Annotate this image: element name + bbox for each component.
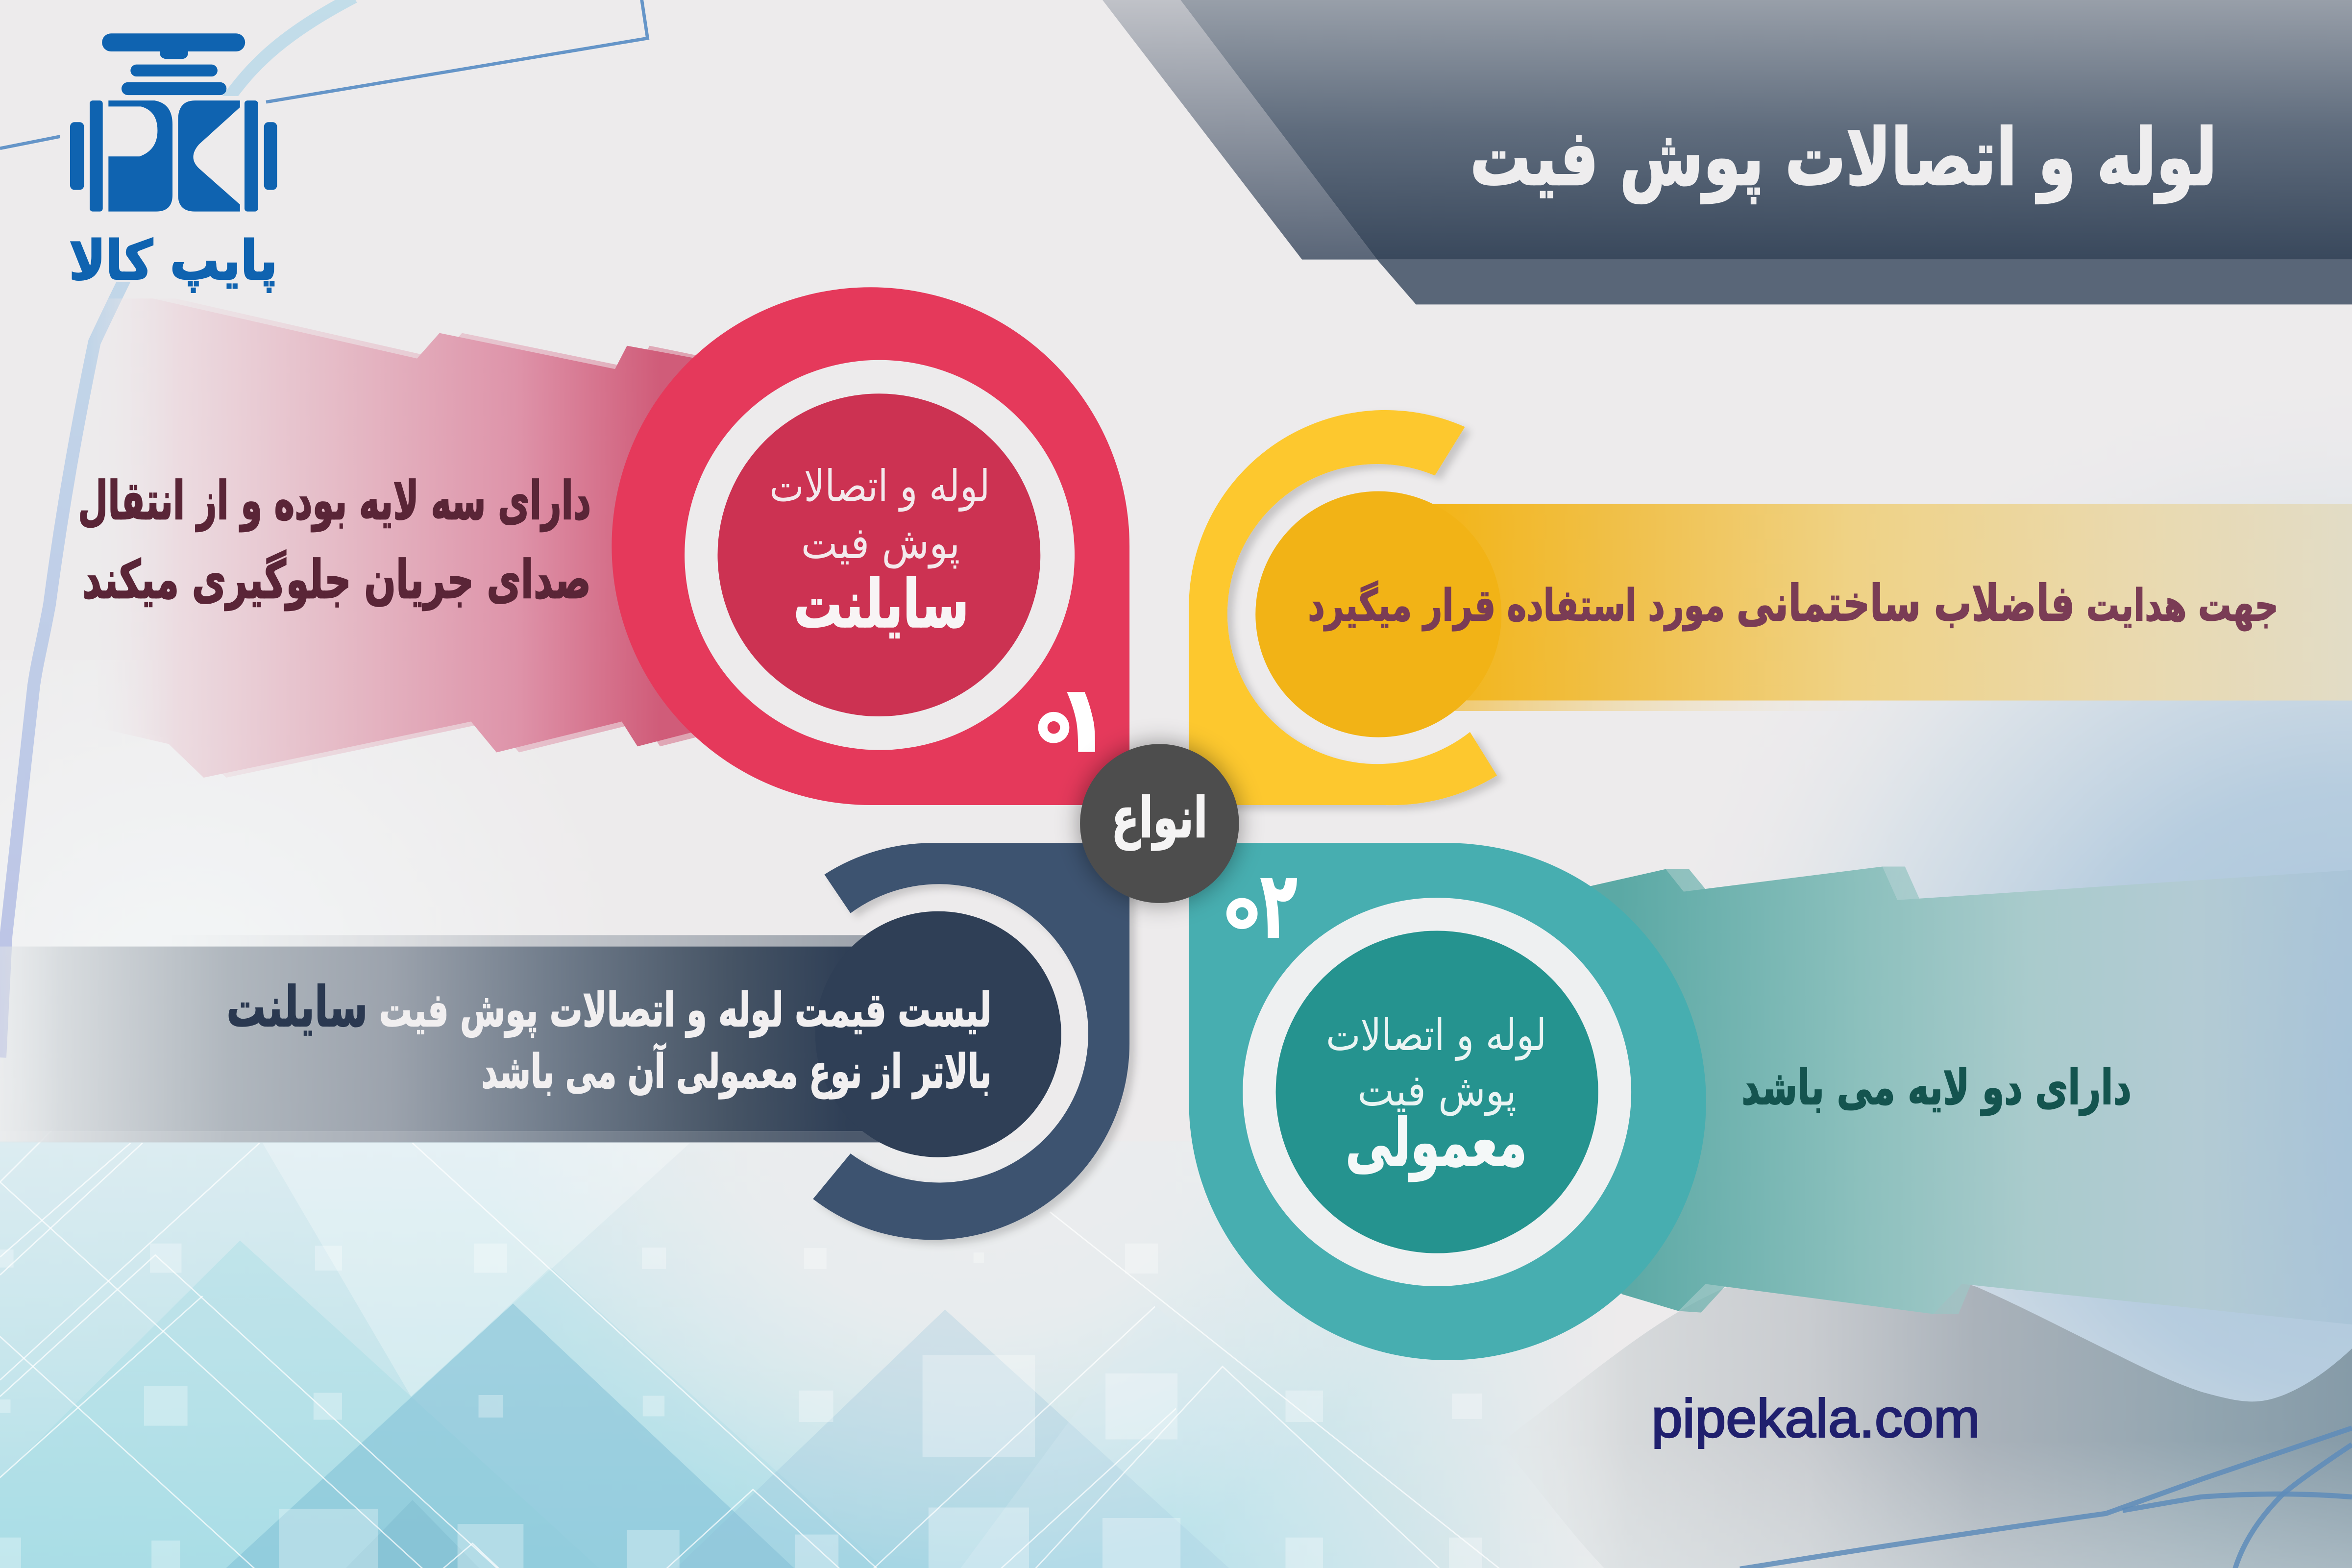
text: navy description: لیست قیمت لوله و اتصالات پوش فیت سایلنت bbox=[226, 975, 991, 1039]
text: navy description: بالاتر از نوع معمولی آن می باشد bbox=[482, 1043, 991, 1099]
panel: teal ribbon bbox=[1589, 866, 2352, 1324]
text: navy description bbox=[226, 975, 991, 1099]
center badge bbox=[1080, 744, 1239, 903]
panel: red pin 01 bbox=[612, 287, 1129, 805]
decorative curved band bbox=[0, 0, 354, 1057]
panel: teal pin 02: معمولی bbox=[1346, 1104, 1527, 1182]
logo wordmark: پایپ کالا bbox=[69, 229, 277, 292]
text: teal description: دارای دو لایه می باشد bbox=[1741, 1060, 2132, 1116]
wave: lower right bbox=[1500, 1271, 2352, 1568]
text: red description bbox=[78, 471, 591, 611]
panel: navy C shape bbox=[813, 843, 1129, 1240]
center badge: انواع bbox=[1111, 785, 1207, 851]
panel: navy ribbon bbox=[0, 935, 885, 1142]
text: yellow description: جهت هدایت فاضلاب ساختمانی مورد استفاده قرار میگیرد bbox=[1308, 574, 2278, 632]
website url: pipekala.com bbox=[1651, 1389, 1980, 1449]
panel: yellow C shape bbox=[1189, 410, 1501, 805]
panel: red ribbon bbox=[0, 298, 705, 778]
panel: red pin 01: پوش فیت bbox=[801, 518, 960, 569]
panel: teal pin 02: پوش فیت bbox=[1357, 1065, 1517, 1116]
panel: teal pin 02: ۲ bbox=[1260, 851, 1298, 959]
panel: teal pin 02 bbox=[1189, 843, 1706, 1360]
logo bbox=[63, 33, 277, 292]
panel: red pin 01: لوله و اتصالات bbox=[769, 461, 990, 512]
text: red description: صدای جریان جلوگیری میکند bbox=[82, 550, 591, 611]
panel: red pin 01: سایلنت bbox=[793, 566, 969, 643]
text: red description: دارای سه لایه بوده و از انتقال bbox=[78, 471, 591, 532]
panel: yellow ribbon bbox=[1418, 504, 2352, 711]
panel: teal pin 02: ۰ bbox=[1233, 897, 1251, 931]
panel: red pin 01: ۱ bbox=[1054, 665, 1111, 774]
header banner bbox=[1102, 0, 2352, 304]
panel: teal pin 02: لوله و اتصالات bbox=[1326, 1010, 1546, 1061]
panel: red pin 01: ۰ bbox=[1044, 710, 1062, 745]
lines: lower right network bbox=[1740, 1428, 2352, 1568]
thin frame lines bbox=[0, 0, 648, 148]
